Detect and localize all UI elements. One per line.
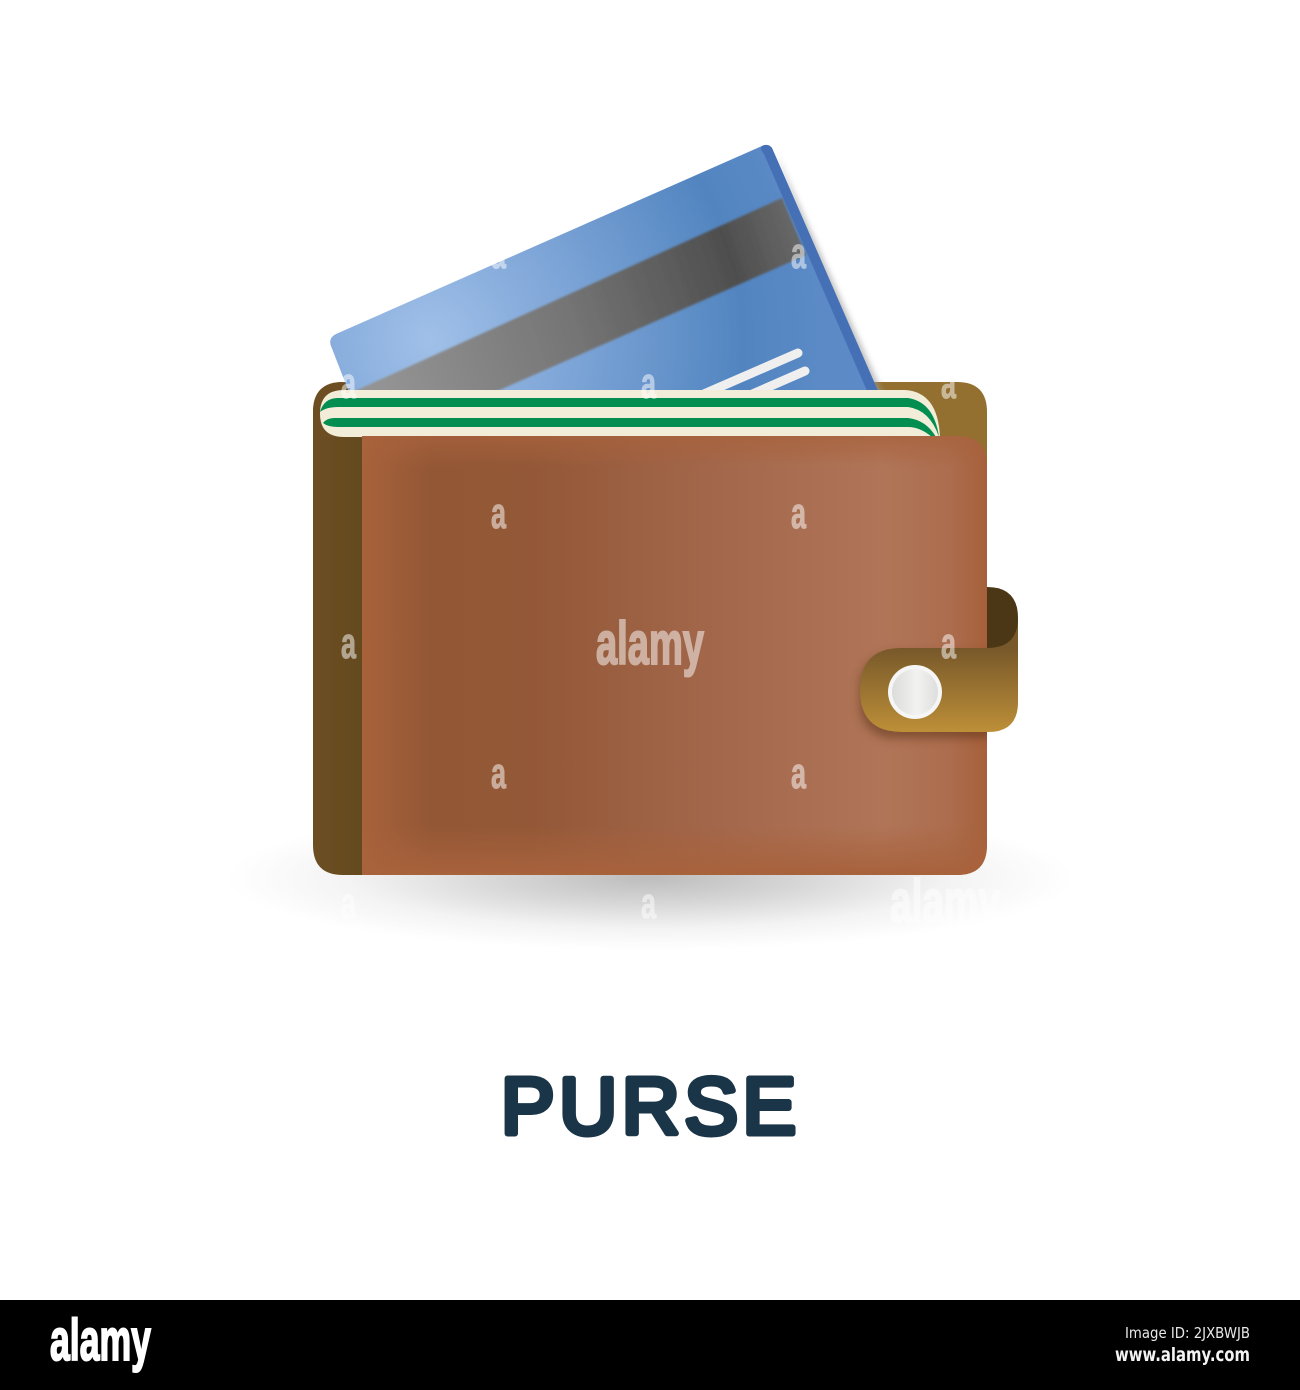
watermark: a <box>491 489 506 538</box>
clasp shadow <box>860 654 1010 738</box>
watermark: a <box>941 359 956 408</box>
watermark: a <box>341 879 356 928</box>
magnetic stripe <box>335 198 806 400</box>
banknotes <box>320 390 940 437</box>
watermark: alamy <box>890 868 1000 935</box>
watermark: a <box>941 619 956 668</box>
watermark: a <box>641 359 656 408</box>
website: www.alamy.com <box>1115 1344 1250 1366</box>
title: PURSE <box>501 1062 796 1150</box>
footer logo: alamy <box>50 1308 151 1373</box>
icon: purse wallet <box>313 145 1018 875</box>
card edge <box>761 145 882 400</box>
watermark <box>341 229 1000 935</box>
footer bar <box>0 1300 1300 1390</box>
watermark: a <box>791 229 806 278</box>
snap button <box>888 665 942 719</box>
card text lines <box>702 348 810 390</box>
floor shadow <box>225 806 1075 950</box>
image id: Image ID: 2JXBWJB <box>1125 1324 1250 1342</box>
watermark: a <box>341 359 356 408</box>
clasp tab <box>860 648 1018 732</box>
watermark: alamy <box>596 610 704 677</box>
watermark: a <box>641 879 656 928</box>
watermark: a <box>491 229 506 278</box>
watermark: a <box>791 489 806 538</box>
watermark: a <box>491 749 506 798</box>
watermark: a <box>341 619 356 668</box>
wallet back panel <box>313 382 987 600</box>
watermark: a <box>791 749 806 798</box>
wallet spine <box>313 437 362 875</box>
wallet front panel <box>362 436 1010 875</box>
clasp strap back <box>987 587 1018 650</box>
credit card <box>330 145 885 406</box>
